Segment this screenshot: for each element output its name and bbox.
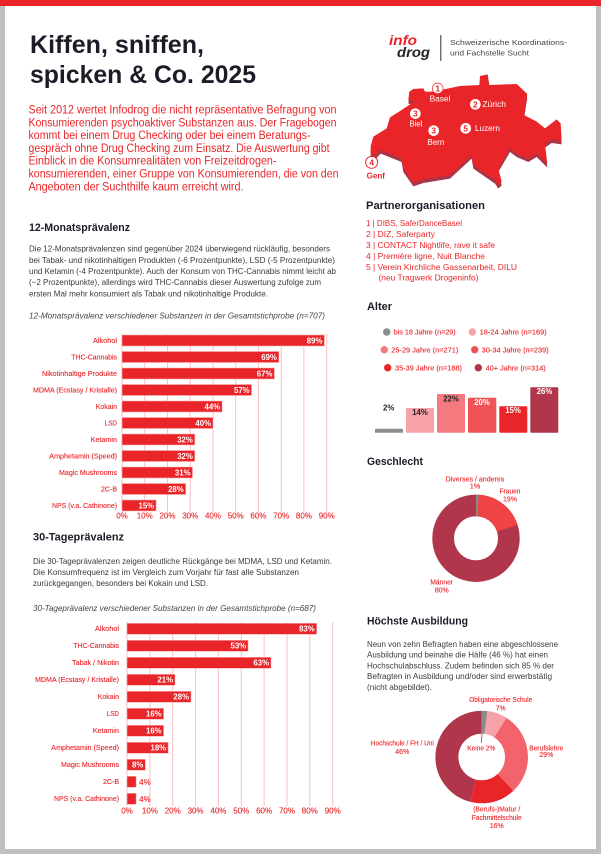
bar chart: 12-Monatsprävalenz: 50% [228, 512, 244, 520]
text block: 30-Tageprävalenz: zurückgegangen, besonders bei Kokain und LSD. [33, 578, 208, 588]
donut chart: Höchste Ausbildung: Hochschule / FH / Uni [371, 738, 434, 748]
title [30, 31, 256, 89]
donut chart: Geschlecht: Männer [430, 577, 454, 586]
bar chart: 30-Tageprävalenz: 4% [139, 778, 151, 787]
legend: Alter: 40+ Jahre (n=314) [486, 363, 546, 372]
bar chart: 30-Tageprävalenz: 83% [299, 624, 315, 634]
text block: Höchste Ausbildung: Hochschulabschluss. Zudem befinden sich 85 % der [367, 660, 554, 670]
bar chart: 30-Tageprävalenz: 4% [139, 795, 151, 804]
logo: infodrog: und Fachstelle Sucht [450, 48, 530, 58]
bar chart: 30-Tageprävalenz: LSD [107, 709, 119, 718]
text block: Höchste Ausbildung [367, 639, 558, 692]
intro text: Einblick in die Konsumrealitäten von Freizeitdrogen- [28, 156, 277, 168]
heading: Höchste Ausbildung: Höchste Ausbildung [367, 616, 468, 628]
map of Switzerland: Bern [427, 137, 445, 147]
title: Kiffen, sniffen, [30, 31, 204, 59]
partner list: 5 | Verein Kirchliche Gassenarbeit, DILU [366, 262, 517, 272]
donut chart: Höchste Ausbildung: Keine 2% [467, 744, 496, 752]
donut chart: Höchste Ausbildung: 7% [496, 704, 506, 712]
bar chart: 30-Tageprävalenz: Kokain [98, 692, 119, 701]
intro text: Konsumierenden psychoaktiver Substanzen aus. Der Fragebogen [28, 118, 336, 130]
partner list: 3 | CONTACT Nightlife, rave it safe [366, 240, 495, 250]
logo: infodrog: drog [397, 44, 430, 60]
legend: Alter: 18-24 Jahre (n=169) [480, 328, 547, 337]
bar chart: 12-Monatsprävalenz: 0% [116, 512, 128, 520]
map of Switzerland: 3 [431, 126, 436, 136]
map of Switzerland: 2 [473, 99, 478, 109]
bar chart: 30-Tageprävalenz: 90% [325, 806, 341, 816]
partner list [366, 218, 517, 282]
partner list: 1 | DIBS, SaferDanceBasel [366, 218, 462, 228]
partner list: 4 | Première ligne, Nuit Blanche [366, 251, 485, 261]
bar chart: 12-Monatsprävalenz: 32% [177, 452, 193, 461]
donut chart: Höchste Ausbildung [371, 695, 563, 830]
donut chart: Geschlecht [430, 474, 520, 594]
bar chart: Alter: 2% [383, 404, 394, 412]
map of Switzerland: Genf [367, 171, 385, 181]
bar chart: 12-Monatsprävalenz: 69% [261, 353, 277, 362]
bar chart: Alter: 22% [443, 394, 459, 404]
bar chart: 30-Tageprävalenz: 10% [142, 806, 158, 816]
text block: 12-Monatsprävalenz: ersten Mal mehr konsumiert als Tabak und nikotinhaltige Produkte. [29, 288, 268, 298]
logo: infodrog: info [389, 32, 417, 48]
map of Switzerland: Zürich [482, 99, 506, 109]
text block: 12-Monatsprävalenz: Die 12-Monatsprävalenzen sind gegenüber 2024 überwiegend rückläufig, besonders [29, 244, 330, 254]
bar chart: 30-Tageprävalenz: 50% [233, 806, 249, 816]
bar chart: 30-Tageprävalenz: Tabak / Nikotin [72, 658, 119, 667]
text block: 30-Tageprävalenz: Die Konsumfrequenz ist im Vergleich zum Vorjahr für fast alle Substanzen [33, 567, 299, 577]
heading: Alter: Alter [367, 301, 393, 313]
bar chart: 30-Tageprävalenz: 80% [302, 806, 318, 816]
bar chart: 30-Tageprävalenz: Alkohol [95, 624, 119, 633]
bar chart: 12-Monatsprävalenz: MDMA (Ecstasy / Kristalle) [33, 386, 117, 394]
legend: Alter: 25-29 Jahre (n=271) [391, 345, 458, 354]
text block: Höchste Ausbildung: Neun von zehn Befragten haben eine abgeschlossene [367, 639, 558, 649]
text block: 12-Monatsprävalenz: (−2 Prozentpunkte), allerdings wird THC-Cannabis dieser Auswertung zufolge zum [29, 277, 321, 287]
bar chart: 30-Tageprävalenz [35, 622, 341, 816]
map of Switzerland: Luzern [475, 123, 500, 133]
donut chart: Höchste Ausbildung: Berufslehre [529, 743, 563, 752]
bar chart: 12-Monatsprävalenz: 57% [234, 386, 250, 395]
text block: Höchste Ausbildung: Befragten in Ausbildung und/oder sind erwerbstätig [367, 671, 552, 681]
text block: 12-Monatsprävalenz: bei Tabak- und nikotinhaltigen Produkten (-6 Prozentpunkte), LSD (-5 Prozentpunkte) [29, 255, 335, 265]
bar chart: 12-Monatsprävalenz: 60% [250, 512, 266, 520]
bar chart: Alter: 15% [505, 406, 521, 415]
bar chart: Alter: 14% [412, 408, 428, 417]
bar chart: 12-Monatsprävalenz: 80% [296, 512, 312, 520]
heading: Geschlecht: Geschlecht [367, 456, 423, 468]
text block: 30-Tageprävalenz [33, 556, 332, 588]
bar chart: 12-Monatsprävalenz: 44% [204, 402, 220, 412]
map of Switzerland: 1 [435, 83, 440, 93]
bar chart: 12-Monatsprävalenz: 2C-B [101, 484, 117, 494]
heading: 30-Tageprävalenz: 30-Tageprävalenz [33, 532, 124, 544]
bar chart: 30-Tageprävalenz: 40% [210, 806, 226, 816]
logo: infodrog [389, 32, 568, 61]
bar chart: 30-Tageprävalenz: 28% [173, 692, 189, 702]
bar chart: 12-Monatsprävalenz: 70% [273, 512, 289, 520]
bar chart: 30-Tageprävalenz: 0% [121, 806, 133, 816]
legend: Alter: 35-39 Jahre (n=188) [395, 363, 462, 372]
bar chart: 12-Monatsprävalenz: 90% [319, 512, 335, 520]
bar chart: 30-Tageprävalenz: 20% [165, 806, 181, 816]
donut chart: Geschlecht: 19% [503, 494, 517, 503]
bar chart: 12-Monatsprävalenz: Kokain [96, 402, 117, 411]
intro text: gespräch ohne Drug Checking zum Einsatz. Die Auswertung gibt [28, 143, 330, 155]
bar chart: 30-Tageprävalenz: Amphetamin (Speed) [51, 743, 119, 752]
bar chart: 30-Tageprävalenz: 16% [146, 726, 162, 736]
text block: 12-Monatsprävalenz [29, 244, 336, 298]
bar chart: 12-Monatsprävalenz: THC-Cannabis [71, 352, 117, 362]
map of Switzerland: 5 [463, 123, 468, 133]
bar chart: 30-Tageprävalenz: Magic Mushrooms [61, 760, 119, 769]
donut chart: Geschlecht: 80% [435, 585, 449, 594]
intro text: Angeboten der Suchthilfe kaum erreicht wird. [28, 182, 244, 194]
map of Switzerland: 4 [369, 157, 374, 167]
map of Switzerland [366, 74, 562, 189]
bar chart: 12-Monatsprävalenz: NPS (v.a. Cathinone) [52, 501, 117, 510]
bar chart: 30-Tageprävalenz: MDMA (Ecstasy / Kristalle) [35, 675, 119, 684]
text block: 30-Tageprävalenz: Die 30-Tageprävalenzen zeigen deutliche Rückgänge bei MDMA, LSD und Ketamin. [33, 556, 332, 566]
partner list: 2 | DIZ, Saferparty [366, 229, 436, 239]
bar chart: 30-Tageprävalenz: NPS (v.a. Cathinone) [54, 794, 119, 803]
donut chart: Höchste Ausbildung: Fachmittelschule [472, 813, 522, 822]
partner list: (neu Tragwerk Drogeninfo) [378, 272, 479, 282]
legend: Alter [381, 328, 549, 372]
bar chart: 30-Tageprävalenz: 2C-B [103, 777, 119, 786]
chart caption: 30-Tageprävalenz: 30-Tageprävalenz verschiedener Substanzen in der Gesamtstichprobe (n=687) [33, 603, 316, 613]
bar chart: 12-Monatsprävalenz: LSD [105, 418, 117, 428]
bar chart: Alter: 26% [537, 387, 552, 396]
donut chart: Geschlecht: Frauen [500, 486, 520, 495]
bar chart: 30-Tageprävalenz: THC-Cannabis [73, 641, 119, 650]
bar chart: 12-Monatsprävalenz: Ketamin [91, 435, 117, 444]
bar chart: 12-Monatsprävalenz: 67% [257, 370, 272, 378]
text block: Höchste Ausbildung: (nicht abgebildet). [367, 682, 432, 692]
legend: Alter: bis 18 Jahre (n=29) [394, 328, 456, 337]
intro text [28, 104, 338, 194]
logo: infodrog: Schweizerische Koordinations- [450, 38, 568, 47]
bar chart: 30-Tageprävalenz: 63% [253, 658, 269, 668]
bar chart: 12-Monatsprävalenz: 15% [138, 502, 154, 510]
bar chart: 12-Monatsprävalenz: Amphetamin (Speed) [49, 452, 117, 460]
bar chart: 12-Monatsprävalenz: Magic Mushrooms [59, 468, 117, 477]
donut chart: Geschlecht: Diverses / anderes [446, 474, 505, 483]
bar chart: 30-Tageprävalenz: 21% [157, 676, 173, 684]
bar chart: 30-Tageprävalenz: Ketamin [93, 726, 119, 735]
map of Switzerland: Biel [409, 119, 422, 129]
map of Switzerland: Basel [430, 94, 450, 104]
map of Switzerland: 3 [413, 109, 418, 119]
bar chart: 12-Monatsprävalenz: 31% [175, 468, 191, 478]
legend: Alter: 30-34 Jahre (n=239) [482, 345, 549, 354]
heading: Partnerorganisationen: Partnerorganisationen [366, 200, 485, 212]
bar chart: 30-Tageprävalenz: 18% [150, 744, 166, 752]
bar chart: 12-Monatsprävalenz: 32% [177, 436, 193, 444]
text block: 12-Monatsprävalenz: und Ketamin (-4 Prozentpunkte). Auch der Konsum von THC-Cannabis nimmt leicht ab [29, 266, 336, 276]
bar chart: 12-Monatsprävalenz: 10% [137, 512, 153, 520]
bar chart: Alter: 20% [474, 398, 490, 407]
donut chart: Geschlecht: 1% [470, 482, 481, 490]
bar chart: 30-Tageprävalenz: 60% [256, 806, 272, 816]
bar chart: 12-Monatsprävalenz: 40% [195, 419, 211, 428]
bar chart: 12-Monatsprävalenz: 30% [182, 512, 198, 520]
bar chart: 12-Monatsprävalenz: 89% [307, 336, 322, 346]
bar chart: 30-Tageprävalenz: 70% [279, 806, 295, 816]
text block: Höchste Ausbildung: Ausbildung und beinahe die Hälfe (46 %) hat einen [367, 650, 548, 660]
donut chart: Höchste Ausbildung: Obligatorische Schule [469, 695, 532, 704]
donut chart: Höchste Ausbildung: 46% [395, 747, 410, 756]
donut chart: Höchste Ausbildung: 16% [490, 821, 504, 830]
title: spicken & Co. 2025 [30, 61, 256, 89]
intro text: konsumierenden, einer Gruppe von Konsumierenden, die von den [28, 168, 338, 180]
donut chart: Höchste Ausbildung: 29% [539, 750, 554, 759]
bar chart: 12-Monatsprävalenz: Alkohol [93, 336, 117, 345]
bar chart: Alter [375, 387, 558, 433]
chart caption: 12-Monatsprävalenz: 12-Monatsprävalenz verschiedener Substanzen in der Gesamtstichprobe (n=707) [29, 310, 325, 320]
bar chart: 12-Monatsprävalenz: Nikotinhaltige Produkte [42, 369, 117, 378]
bar chart: 12-Monatsprävalenz: 28% [168, 485, 184, 494]
bar chart: 12-Monatsprävalenz [33, 334, 335, 520]
heading: 12-Monatsprävalenz: 12-Monatsprävalenz [29, 222, 130, 234]
bar chart: 30-Tageprävalenz: 16% [146, 710, 162, 718]
donut chart: Höchste Ausbildung: (Berufs-)Matur / [473, 804, 521, 814]
bar chart: 12-Monatsprävalenz: 40% [205, 512, 221, 520]
bar chart: 30-Tageprävalenz: 30% [188, 806, 204, 816]
bar chart: 30-Tageprävalenz: 53% [230, 642, 246, 650]
bar chart: 30-Tageprävalenz: 8% [132, 760, 143, 770]
intro text: kommt bei einem Drug Checking oder bei einem Beratungs- [28, 130, 311, 142]
bar chart: 12-Monatsprävalenz: 20% [159, 512, 176, 520]
intro text: Seit 2012 wertet Infodrog die nicht repräsentative Befragung von [28, 104, 336, 116]
